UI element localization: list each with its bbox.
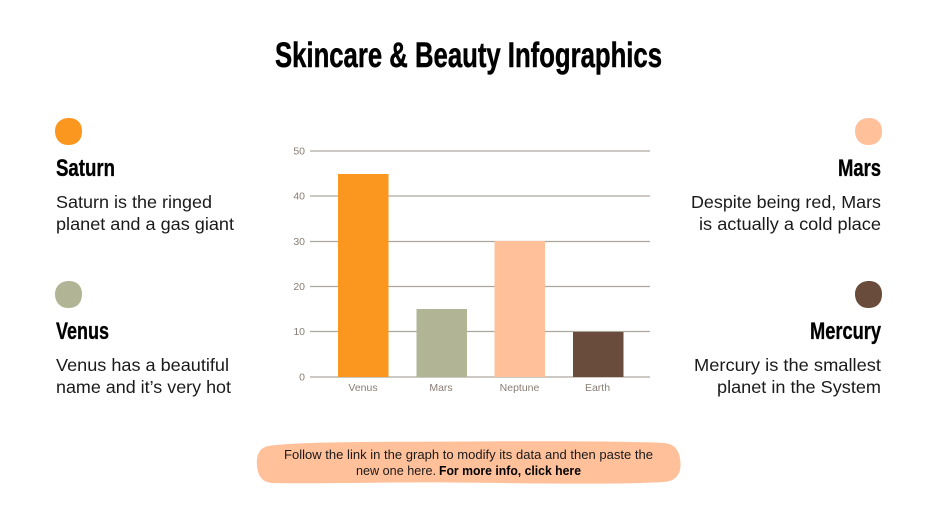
text: Mars description: is actually a cold place	[699, 214, 881, 234]
y axis labels	[293, 146, 305, 384]
bar: Neptune	[494, 241, 545, 377]
bar chart	[293, 146, 650, 394]
callout text	[284, 448, 653, 478]
bar: Venus	[338, 174, 388, 377]
text: Mercury description: Mercury is the smallest	[694, 355, 881, 375]
icon: Saturn orange dot	[55, 118, 82, 145]
panel: Mars	[691, 118, 882, 234]
y axis labels: 0	[299, 372, 305, 384]
y axis labels: 50	[293, 146, 305, 158]
text: Mercury description	[694, 355, 881, 397]
callout background brush shape	[257, 441, 681, 484]
callout text: For more info, click here	[439, 464, 581, 478]
bar: Earth	[573, 332, 624, 377]
panel: Mercury	[694, 281, 882, 397]
callout text: new one here.	[356, 464, 436, 478]
callout text: Follow the link in the graph to modify its data and then paste the	[284, 448, 653, 462]
text: Mars description	[691, 192, 881, 234]
heading: Mars: Mars	[838, 155, 881, 182]
icon: Mercury brown dot	[855, 281, 882, 308]
heading: Venus: Venus	[56, 318, 109, 345]
heading: Mercury: Mercury	[810, 318, 881, 345]
y axis labels: 40	[293, 190, 305, 202]
x axis labels	[348, 382, 610, 394]
text: Mars description: Despite being red, Mars	[691, 192, 881, 212]
x axis labels: Venus	[348, 382, 378, 394]
y axis labels: 20	[293, 281, 305, 293]
x axis labels: Mars	[429, 382, 453, 394]
text: Venus description: Venus has a beautiful	[56, 355, 229, 375]
x axis labels: Neptune	[500, 382, 540, 394]
x axis labels: Earth	[585, 382, 610, 394]
panel: Venus	[55, 281, 231, 397]
text: Saturn description: Saturn is the ringed	[56, 192, 212, 212]
icon: Mars peach dot	[855, 118, 882, 145]
panel: Saturn	[55, 118, 234, 234]
text: Venus description: name and it’s very hot	[56, 377, 231, 397]
title: Skincare & Beauty Infographics	[275, 36, 662, 75]
text: Mercury description: planet in the System	[717, 377, 881, 397]
y axis labels: 30	[293, 236, 305, 248]
callout	[257, 441, 681, 484]
bar: Mars	[416, 309, 467, 377]
y axis labels: 10	[293, 326, 305, 338]
text: Saturn description	[56, 192, 234, 234]
heading: Saturn: Saturn	[56, 155, 115, 182]
text: Venus description	[56, 355, 231, 397]
icon: Venus sage dot	[55, 281, 82, 308]
text: Saturn description: planet and a gas giant	[56, 214, 234, 234]
